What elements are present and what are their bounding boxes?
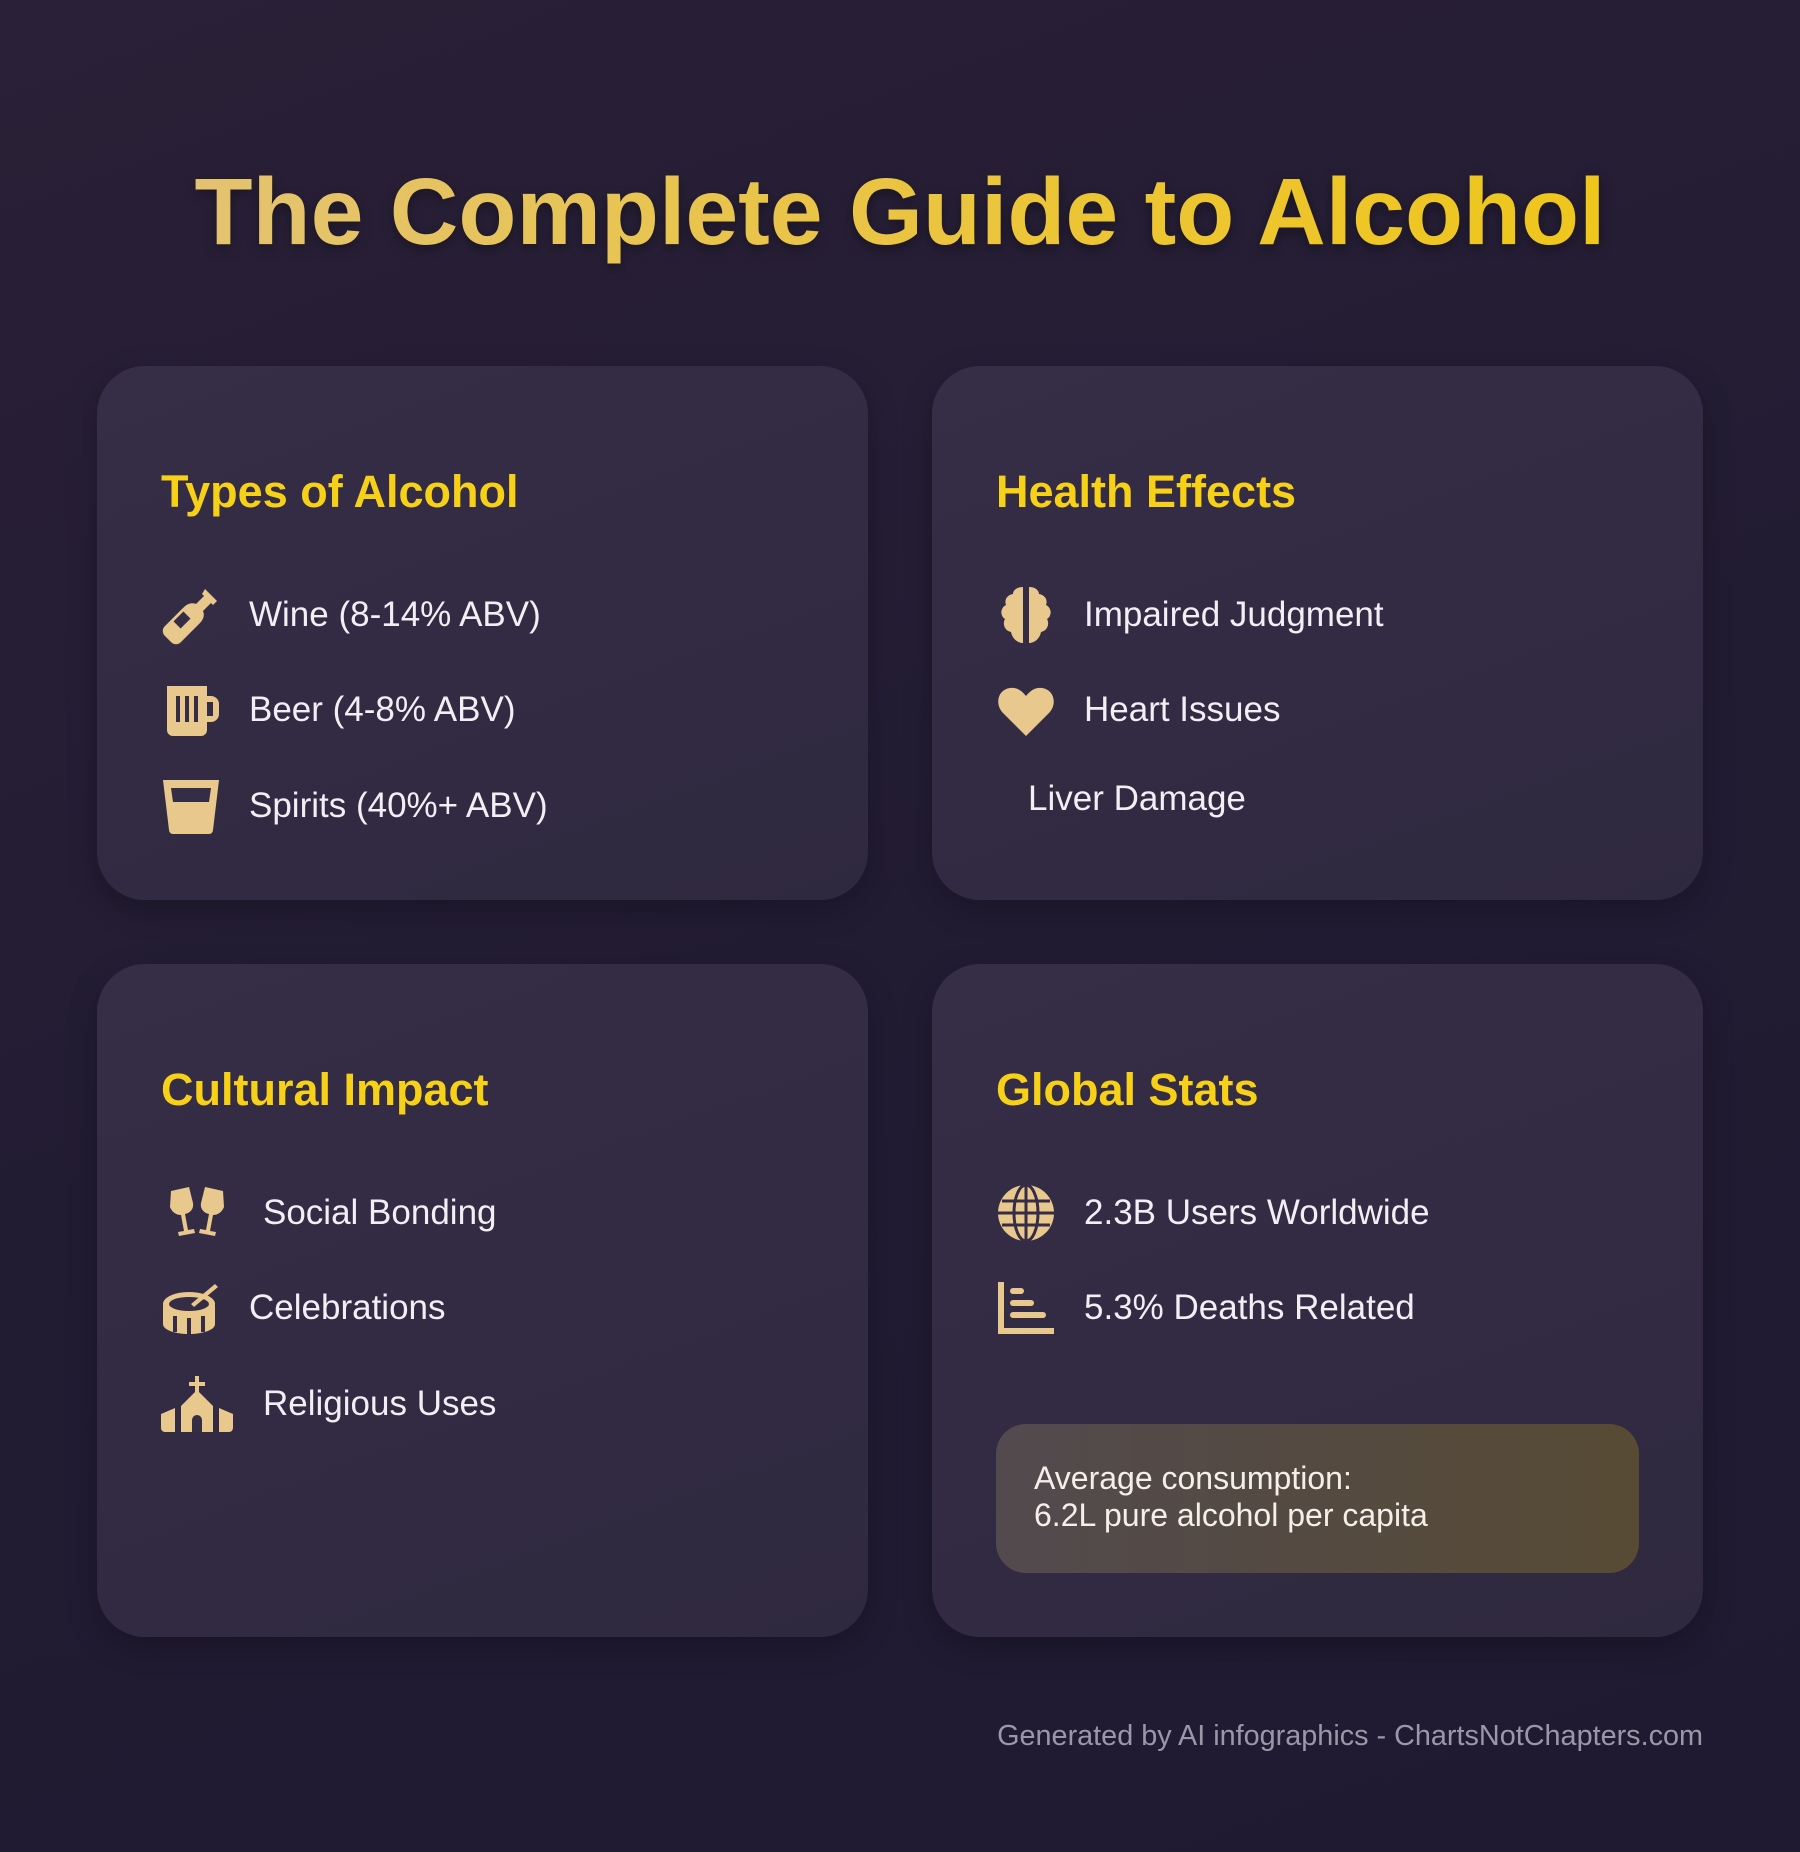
item: users <box>998 1185 1430 1241</box>
item: impaired judgment <box>1001 587 1384 643</box>
item: users: 2.3B Users Worldwide <box>1084 1193 1430 1232</box>
item: wine: Wine (8-14% ABV) <box>249 595 541 634</box>
item: religious uses: Religious Uses <box>263 1384 496 1423</box>
title <box>0 152 1800 272</box>
panel: global stats <box>932 964 1703 1637</box>
item: spirits <box>163 780 548 834</box>
item: social bonding: Social Bonding <box>263 1193 496 1232</box>
heading: cultural: Cultural Impact <box>161 1064 489 1115</box>
footer: Generated by AI infographics - ChartsNotChapters.com <box>997 1720 1703 1752</box>
item: heart issues <box>998 688 1280 736</box>
panel: cultural impact <box>97 964 868 1637</box>
heading: types: Types of Alcohol <box>161 466 519 517</box>
item: beer: Beer (4-8% ABV) <box>249 690 516 729</box>
item: social bonding <box>170 1187 496 1236</box>
callout: average consumption <box>996 1424 1639 1573</box>
heading: global: Global Stats <box>996 1064 1259 1115</box>
item: religious uses <box>161 1376 496 1432</box>
item: celebrations: Celebrations <box>249 1288 446 1327</box>
title: The Complete Guide to Alcohol <box>195 159 1605 265</box>
item: impaired judgment: Impaired Judgment <box>1084 595 1384 634</box>
item: celebrations <box>163 1284 446 1334</box>
item: heart issues: Heart Issues <box>1084 690 1280 729</box>
item: spirits: Spirits (40%+ ABV) <box>249 786 548 825</box>
callout: average consumption: 6.2L pure alcohol per capita <box>1034 1497 1428 1533</box>
item: deaths <box>998 1282 1415 1334</box>
callout: average consumption: Average consumption: <box>1034 1460 1352 1496</box>
item: beer <box>167 686 516 736</box>
item: liver damage: Liver Damage <box>1028 779 1246 818</box>
panel: types of alcohol <box>97 366 868 900</box>
item: wine <box>162 589 541 644</box>
item: deaths: 5.3% Deaths Related <box>1084 1288 1415 1327</box>
heading: health: Health Effects <box>996 466 1296 517</box>
panel: health effects <box>932 366 1703 900</box>
